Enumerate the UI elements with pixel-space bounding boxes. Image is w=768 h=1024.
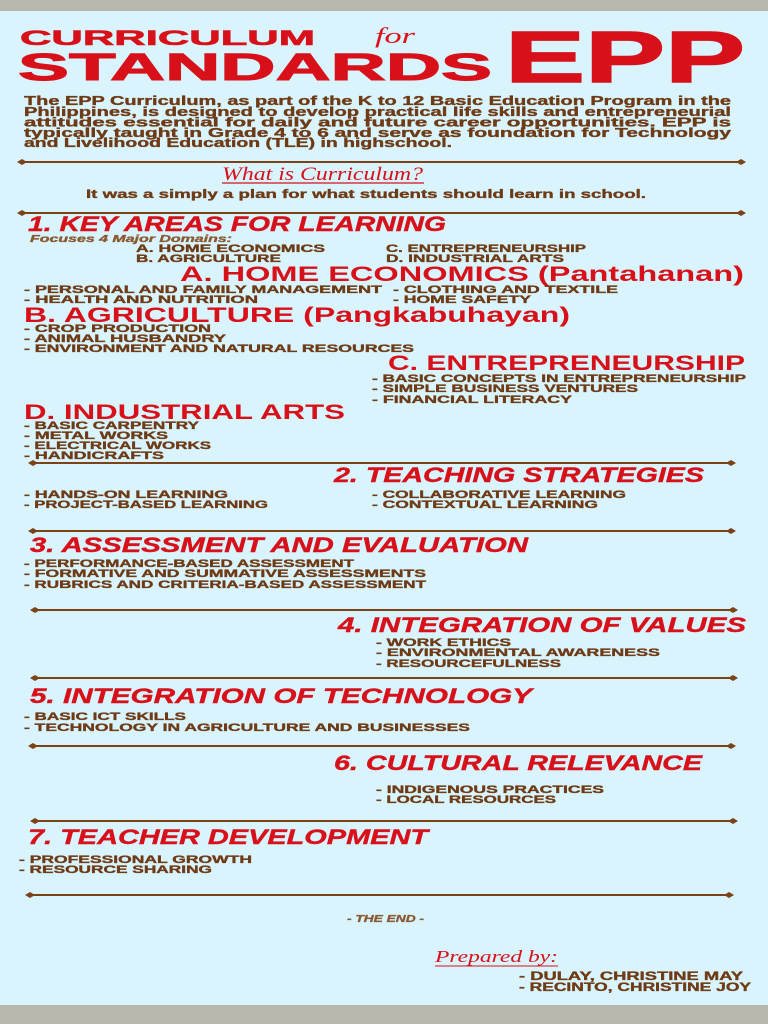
section 1: key areas: Focuses 4 Major Domains: xyxy=(30,234,232,245)
domain B: agriculture: - ANIMAL HUSBANDRY xyxy=(24,333,227,345)
title xyxy=(18,18,745,98)
section 1: key areas xyxy=(28,213,586,265)
section 4: integration of values: - RESOURCEFULNESS xyxy=(376,658,561,670)
section 5: integration of technology: - TECHNOLOGY IN AGRICULTURE AND BUSINESSES xyxy=(24,722,470,734)
section 2: teaching strategies: - PROJECT-BASED LEARNING xyxy=(24,499,268,511)
intro paragraph xyxy=(24,94,731,150)
domain A: home economics: - HOME SAFETY xyxy=(393,294,532,306)
section 2: teaching strategies: - COLLABORATIVE LEARNING xyxy=(372,489,626,501)
title: for xyxy=(375,23,416,48)
domain C: entrepreneurship: - FINANCIAL LITERACY xyxy=(372,394,573,406)
domain D: industrial arts: - ELECTRICAL WORKS xyxy=(24,440,211,452)
domain D: industrial arts: D. INDUSTRIAL ARTS xyxy=(24,401,345,424)
section 7: teacher development xyxy=(19,826,431,876)
domain A: home economics: A. HOME ECONOMICS (Pantahanan) xyxy=(180,263,744,286)
section 1: key areas: A. HOME ECONOMICS xyxy=(136,243,325,255)
section 7: teacher development: 7. TEACHER DEVELOPMENT xyxy=(28,826,431,849)
domain B: agriculture: - CROP PRODUCTION xyxy=(24,323,211,335)
heading: what is curriculum: What is Curriculum? xyxy=(222,164,424,185)
domain B: agriculture xyxy=(24,304,570,355)
domain A: home economics: - CLOTHING AND TEXTILE xyxy=(393,284,618,296)
section 2: teaching strategies xyxy=(24,464,704,511)
domain A: home economics: - PERSONAL AND FAMILY MANAGEMENT xyxy=(24,284,382,296)
section 5: integration of technology: 5. INTEGRATION OF TECHNOLOGY xyxy=(30,685,535,708)
domain A: home economics xyxy=(24,263,744,306)
section 3: assessment and evaluation: - FORMATIVE AND SUMMATIVE ASSESSMENTS xyxy=(24,568,426,580)
section 1: key areas: D. INDUSTRIAL ARTS xyxy=(386,253,564,265)
prepared by: - DULAY, CHRISTINE MAY xyxy=(519,969,743,983)
section 1: key areas: 1. KEY AREAS FOR LEARNING xyxy=(28,213,446,236)
domain C: entrepreneurship xyxy=(372,352,746,406)
section 2: teaching strategies: - CONTEXTUAL LEARNING xyxy=(372,499,598,511)
section 6: cultural relevance: - INDIGENOUS PRACTICES xyxy=(376,784,604,796)
intro paragraph: and Livelihood Education (TLE) in highschool. xyxy=(24,136,452,150)
domain A: home economics: - HEALTH AND NUTRITION xyxy=(24,294,258,306)
section 7: teacher development: - PROFESSIONAL GROWTH xyxy=(19,854,252,866)
section 4: integration of values xyxy=(337,614,746,670)
section 7: teacher development: - RESOURCE SHARING xyxy=(19,864,212,876)
section 4: integration of values: 4. INTEGRATION OF VALUES xyxy=(337,614,746,637)
section 3: assessment and evaluation: - RUBRICS AND CRITERIA-BASED ASSESSMENT xyxy=(24,579,426,591)
section 5: integration of technology xyxy=(24,685,535,734)
intro paragraph: typically taught in Grade 4 to 6 and serve as foundation for Technology xyxy=(24,126,731,140)
domain B: agriculture: B. AGRICULTURE (Pangkabuhayan) xyxy=(24,304,570,327)
section 3: assessment and evaluation xyxy=(24,534,529,591)
domain D: industrial arts xyxy=(24,401,345,462)
section 5: integration of technology: - BASIC ICT SKILLS xyxy=(24,711,186,723)
domain D: industrial arts: - METAL WORKS xyxy=(24,430,168,442)
section 6: cultural relevance: - LOCAL RESOURCES xyxy=(376,794,556,806)
prepared by: - RECINTO, CHRISTINE JOY xyxy=(519,980,751,994)
prepared by xyxy=(434,947,751,994)
title: CURRICULUM xyxy=(20,27,315,50)
section 4: integration of values: - ENVIRONMENTAL AWARENESS xyxy=(376,647,660,659)
section 6: cultural relevance: 6. CULTURAL RELEVANCE xyxy=(334,752,703,775)
prepared by: Prepared by: xyxy=(434,947,558,966)
intro paragraph: attitudes essential for daily and future career opportunities. EPP is xyxy=(24,116,731,130)
section 1: key areas: B. AGRICULTURE xyxy=(136,253,281,265)
section 6: cultural relevance xyxy=(334,752,703,806)
section 3: assessment and evaluation: - PERFORMANCE-BASED ASSESSMENT xyxy=(24,558,354,570)
section 3: assessment and evaluation: 3. ASSESSMENT AND EVALUATION xyxy=(30,534,529,557)
domain C: entrepreneurship: C. ENTREPRENEURSHIP xyxy=(388,352,745,375)
section 2: teaching strategies: - HANDS-ON LEARNING xyxy=(24,489,228,501)
section 4: integration of values: - WORK ETHICS xyxy=(376,637,511,649)
intro paragraph: Philippines, is designed to develop practical life skills and entrepreneurial xyxy=(24,105,731,119)
intro paragraph: The EPP Curriculum, as part of the K to 12 Basic Education Program in the xyxy=(24,94,731,108)
section 1: key areas: C. ENTREPRENEURSHIP xyxy=(386,243,586,255)
domain C: entrepreneurship: - BASIC CONCEPTS IN ENTREPRENEURSHIP xyxy=(372,373,746,385)
title: STANDARDS xyxy=(18,47,492,89)
domain B: agriculture: - ENVIRONMENT AND NATURAL RESOURCES xyxy=(24,343,414,355)
section 2: teaching strategies: 2. TEACHING STRATEGIES xyxy=(333,464,704,487)
domain D: industrial arts: - HANDICRAFTS xyxy=(24,450,164,462)
domain D: industrial arts: - BASIC CARPENTRY xyxy=(24,420,200,432)
domain C: entrepreneurship: - SIMPLE BUSINESS VENTURES xyxy=(372,383,638,395)
definition text: It was a simply a plan for what students should learn in school. xyxy=(86,187,646,201)
the end: - THE END - xyxy=(347,914,425,925)
title: EPP xyxy=(505,18,745,98)
